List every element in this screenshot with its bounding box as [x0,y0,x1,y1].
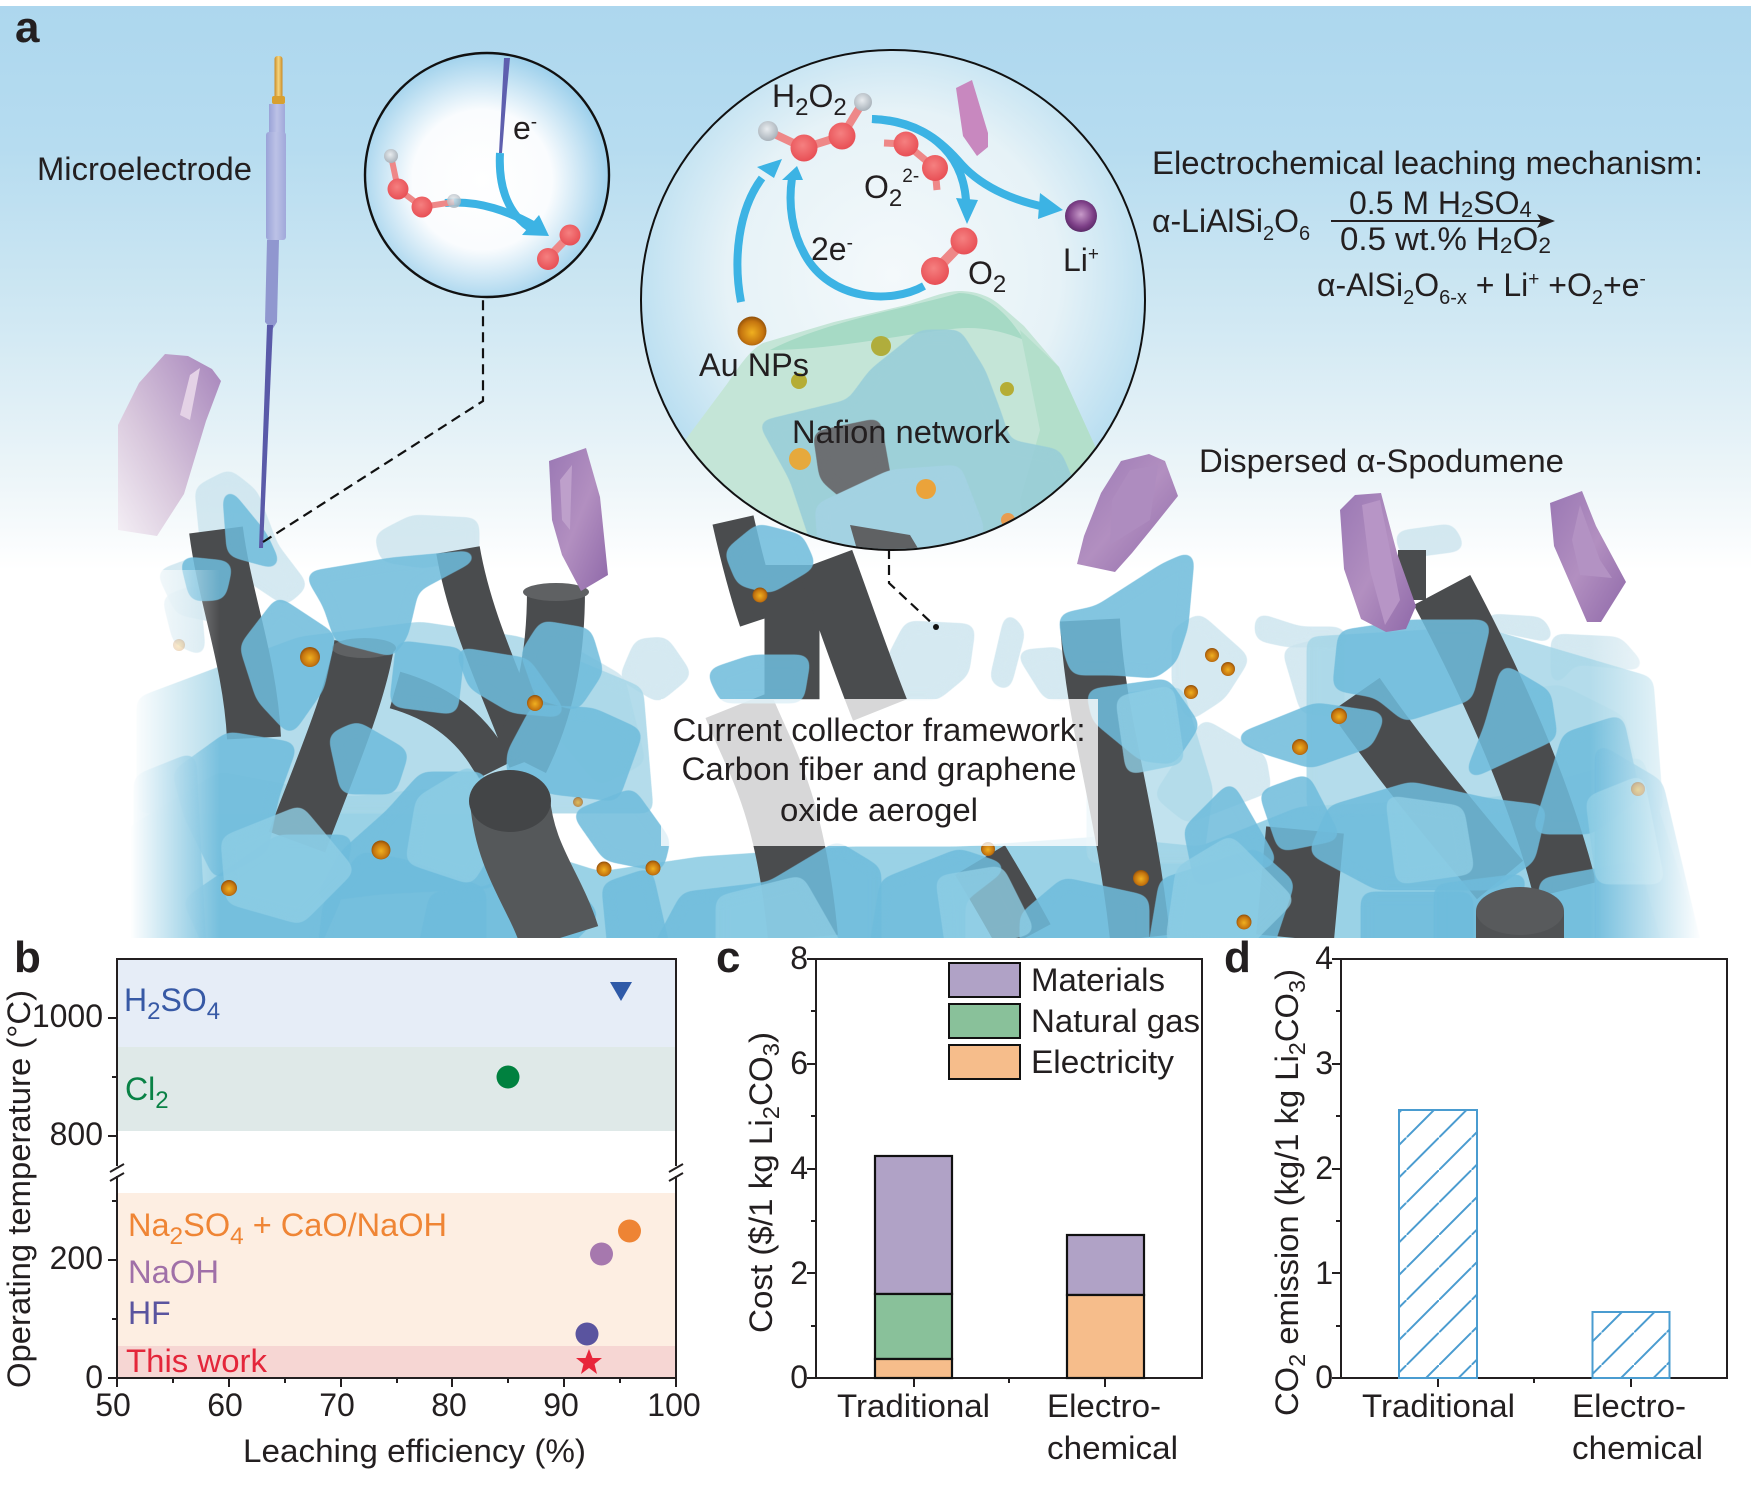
y title: 3 [758,1043,784,1056]
peroxide ion [884,132,948,190]
x tick labels: Electro- [1572,1388,1686,1424]
y title: 2 [758,1106,784,1119]
label H2O2: 2 [833,94,847,121]
callout: current collector framework [661,699,1098,846]
gold nanoparticles [173,588,1645,930]
band H2SO4 [117,959,676,1047]
label Na2SO4: 2 [170,1223,183,1250]
mechanism equation [1152,145,1703,309]
y tick labels: 2 [790,1255,808,1291]
label Cl2: Cl [125,1071,155,1107]
x tick labels: 60 [207,1387,243,1423]
fibre cut tops [332,583,589,658]
products: α-AlSi [1317,267,1403,303]
blue flakes in blob [762,330,1071,537]
bar traditional hatched [1399,1110,1477,1378]
panel letter a: a [15,3,40,52]
peroxide condition: 2 [1538,233,1551,258]
y title: 2 [1284,1042,1310,1055]
series labels: SO [160,982,207,1018]
label Na2SO4: Na [128,1207,169,1243]
label dispersed spodumene: Dispersed α-Spodumene [1199,443,1564,479]
microelectrode [259,56,286,548]
band Cl2 [117,1047,676,1131]
reactant: O [1274,203,1299,239]
label Na2SO4: + CaO/NaOH [244,1207,447,1243]
acid condition: SO [1473,185,1520,221]
x tick labels: 80 [431,1387,467,1423]
marker Cl2 [496,1066,520,1088]
products: + [1528,269,1539,290]
label Li+: + [1088,244,1099,265]
y tick labels: 0 [790,1359,808,1395]
series labels: 2 [147,998,160,1025]
panel d: CO2 emission bars [1269,940,1727,1466]
callout: current collector framework: Current collector framework: [672,712,1086,748]
y tick labels: 6 [790,1045,808,1081]
y tick labels: 3 [1315,1045,1333,1081]
panel b: scatter chart [1,959,701,1469]
crystal: spodumene left [118,354,221,536]
dashed leader: small inset to electrode tip [263,296,483,542]
y title: emission (kg/1 kg Li [1269,1055,1305,1354]
O2 molecule [921,228,978,285]
reactant: 6 [1299,223,1310,245]
band hydrometallurgy [117,1193,676,1346]
label Cl2: 2 [155,1087,169,1114]
marker NaOH [590,1242,613,1266]
bar electrochemical hatched [1592,1312,1670,1378]
products: 2 [1403,287,1414,309]
x tick labels [1362,1388,1703,1466]
legend [949,962,1200,1080]
label 2e-: - [847,233,853,254]
inset circle: electrode reaction [365,53,609,297]
label Au NPs: Au NPs [699,347,809,383]
y title: CO [1269,1368,1305,1416]
acid condition: 4 [1520,197,1532,222]
needle in inset [499,58,510,153]
particles in blob [789,336,1015,527]
label H2O2: O [808,78,833,114]
legend: Materials [1031,962,1165,998]
label H2O2: H [772,78,795,114]
arrowheads [757,159,1063,224]
electron arrow [500,153,530,228]
Nafion green blob [686,291,1059,534]
left edge fade [130,570,220,938]
front fibre ends [469,770,1564,938]
green rim shading [770,293,1024,350]
reactant: 2 [1263,223,1274,245]
callout: current collector framework: oxide aerogel [780,792,978,828]
products: + Li [1467,267,1528,303]
marker HF [576,1322,598,1346]
marker H2SO4 [610,982,632,1001]
lighter overlapping flakes [225,690,1660,950]
y title: 3 [1284,980,1310,993]
pale back flakes [163,475,1640,820]
right edge fade [1596,637,1700,938]
pale flake in blob [816,466,983,548]
y title: CO [1269,993,1305,1042]
label 2e-: 2e [811,231,847,267]
acid condition: 2 [1461,197,1473,222]
y tick labels: 4 [790,1150,808,1186]
y tick labels: 200 [50,1240,103,1276]
panel c: stacked cost bars [743,940,1202,1466]
y title: Operating temperature (°C) [1,990,37,1388]
Au nanoparticle [738,316,766,346]
x tick labels [837,1388,1178,1466]
Li+ ion [1065,200,1097,232]
oxidation arrow [445,203,535,226]
label NaOH: NaOH [128,1254,219,1290]
series labels: H [124,982,147,1018]
cycle arrows [737,119,1045,302]
products: 2 [1592,287,1603,309]
y tick labels: 2 [1315,1150,1333,1186]
dashed leader: large inset to framework [889,549,939,630]
label H2O2: 2 [795,94,808,121]
legend: Natural gas [1031,1003,1200,1039]
label O2: 2 [993,271,1006,298]
y tick labels [1315,940,1333,1395]
products: 6-x [1439,287,1467,309]
y tick labels: 1000 [32,998,103,1034]
axes [108,959,683,1387]
crystal: spodumene centre-left [549,448,608,591]
label e-: - [531,112,537,133]
label O2: O [968,255,993,291]
x tick labels: 50 [95,1387,131,1423]
y tick labels: 4 [1315,940,1333,976]
label Na2SO4: SO [183,1207,230,1243]
panel letter d: d [1224,933,1251,982]
x tick labels: Traditional [837,1388,990,1424]
dark fibre in blob [814,420,890,494]
y tick labels: 8 [790,940,808,976]
products: - [1639,269,1646,290]
label peroxide: 2- [902,166,919,187]
x title: Leaching efficiency (%) [243,1433,586,1469]
y title: Cost ($/1 kg Li [743,1127,779,1333]
y title: CO [743,1056,779,1106]
x tick labels: Electro- [1047,1388,1161,1424]
label Nafion network: Nafion network [792,414,1011,450]
marker Na2SO4 [618,1220,641,1242]
right edge white margin [1701,570,1751,938]
panel a: fibre and flake scene [0,475,1751,950]
x tick labels: 100 [647,1387,701,1423]
mid blue graphene flakes [140,497,1696,950]
label HF: HF [128,1295,171,1331]
reaction arrow [1331,214,1555,228]
label e-: e [513,110,531,146]
H2O2 molecule [758,93,872,162]
acid condition: 0.5 M H [1349,185,1461,221]
label peroxide: O [864,169,889,205]
peroxide condition: 0.5 wt.% H [1340,221,1495,257]
products: +O [1539,267,1592,303]
crystal in inset [956,80,988,156]
label microelectrode: Microelectrode [37,151,252,187]
inset circle: catalytic cycle [640,50,1145,600]
crystal: spodumene right [1550,491,1626,622]
legend: Electricity [1031,1044,1174,1080]
panel letter c: c [716,933,740,982]
label peroxide: 2 [889,185,902,212]
crystal: spodumene centre-right [1077,454,1178,572]
O2 molecule small [537,224,580,270]
y tick labels [32,998,103,1395]
x tick labels: Traditional [1362,1388,1515,1424]
panel a: sky background [0,6,1751,570]
marker this work [576,1349,602,1374]
light blue base mass bottom [130,625,1700,950]
x tick labels: 90 [543,1387,579,1423]
series labels: 4 [207,998,220,1025]
x tick labels: 70 [319,1387,355,1423]
callout: current collector framework: Carbon fiber and graphene [682,751,1076,787]
x tick labels: chemical [1047,1430,1178,1466]
dark lower fibre [850,525,918,549]
products: O [1414,267,1439,303]
y title: 2 [1284,1354,1310,1367]
bar traditional [875,1156,952,1378]
equation title: Electrochemical leaching mechanism: [1152,145,1703,181]
bar electrochemical [1067,1235,1144,1378]
reactant: α-LiAlSi [1152,203,1263,239]
y title: ) [743,1032,779,1043]
crystal: spodumene on fibre [1340,493,1416,632]
axes [1332,959,1727,1387]
y tick labels: 800 [50,1116,103,1152]
axes [807,959,1202,1387]
y tick labels: 0 [1315,1359,1333,1395]
products: +e [1603,267,1639,303]
y title: ) [1269,969,1305,980]
band this work [117,1346,676,1378]
y tick labels: 0 [85,1359,103,1395]
y tick labels [790,940,808,1395]
y tick labels: 1 [1315,1255,1333,1291]
H2O2 molecule small [384,149,461,218]
peroxide condition: O [1513,221,1538,257]
green lower right [1020,330,1096,475]
x tick labels: chemical [1572,1430,1703,1466]
peroxide condition: 2 [1500,233,1513,258]
label Na2SO4: 4 [230,1223,244,1250]
left edge white margin [126,828,130,938]
panel letter b: b [14,933,41,982]
x tick labels [95,1387,701,1423]
label this work: This work [126,1343,268,1379]
label Li+: Li [1063,242,1088,278]
arrowhead [522,215,549,236]
carbon fibres [216,520,1565,938]
